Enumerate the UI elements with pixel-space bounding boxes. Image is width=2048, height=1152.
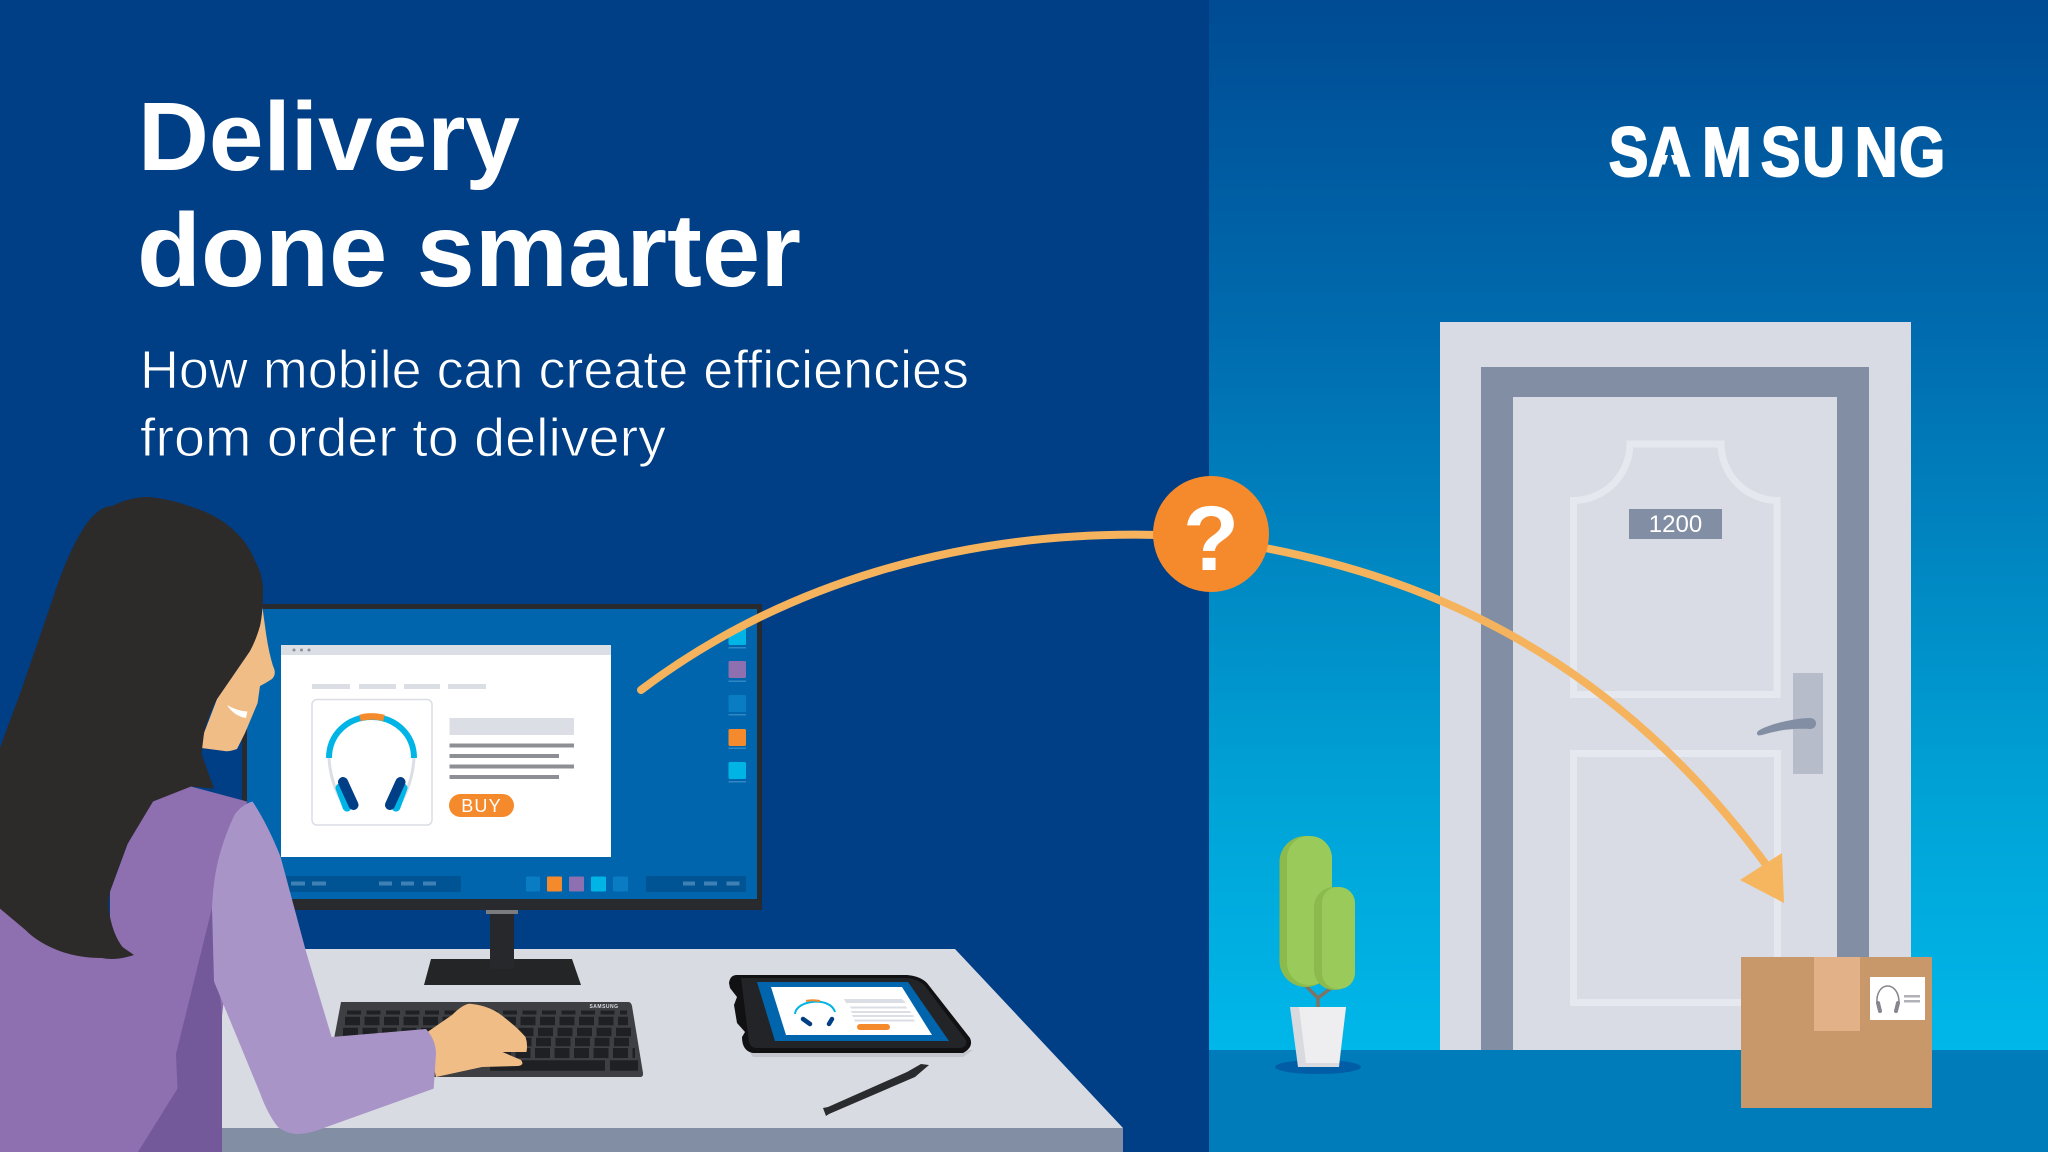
desk: [221, 949, 1123, 1152]
box tape: [1814, 957, 1860, 1031]
stand base: [424, 959, 581, 985]
headphone wires: [329, 758, 414, 802]
arrow: question mark to parcel: [1265, 548, 1784, 903]
door outer frame: [1440, 322, 1911, 1050]
question mark: ?: [1183, 488, 1239, 590]
face: [202, 590, 275, 751]
monitor screen: [247, 609, 757, 899]
torso shadow: [138, 908, 222, 1152]
monitor stand: [424, 909, 581, 985]
box: package: [1741, 957, 1932, 1108]
subtitle line 1: How mobile can create efficiencies: [140, 340, 969, 400]
door inner dark frame: [1481, 367, 1869, 1050]
headphone cups: [343, 782, 400, 805]
tablet: [729, 975, 973, 1057]
button pill: [449, 794, 514, 817]
plant shadow: [1275, 1060, 1361, 1074]
door handle: [1757, 673, 1823, 774]
desk front: [221, 1128, 1123, 1152]
subtitle: [140, 340, 969, 468]
tablet headphones: [795, 1000, 835, 1024]
door number: 1200: [1649, 511, 1702, 538]
desktop side icons: [728, 628, 746, 782]
window body: [281, 645, 611, 857]
desk top: [221, 949, 1123, 1128]
handle plate: [1793, 673, 1823, 774]
wall gradient: [1209, 0, 2048, 1050]
stylus pen: [823, 1064, 929, 1116]
monitor bezel: [242, 604, 762, 910]
label lines: [1904, 995, 1920, 1002]
browser window: [281, 645, 611, 857]
stand neck: [490, 909, 514, 969]
tablet text lines: [844, 999, 915, 1022]
plant pot: [1299, 1007, 1346, 1063]
icon: headphones: [329, 716, 414, 807]
window dots: [292, 648, 310, 652]
door: [1440, 322, 1911, 1050]
plant stems: [1306, 986, 1331, 1008]
arrow line: [1265, 548, 1770, 870]
subtitle line 2: from order to delivery: [140, 408, 666, 468]
product title bar: [450, 718, 574, 735]
buy button: [449, 794, 514, 817]
tablet screen: [757, 982, 949, 1041]
icon: label headphones: [1877, 986, 1899, 1011]
taskbar: [250, 876, 746, 892]
headphone band: [329, 717, 414, 758]
tablet shadow: [745, 1045, 973, 1057]
keyboard brand: SAMSUNG: [589, 1004, 619, 1010]
product card: [312, 700, 432, 825]
door leaf: [1513, 397, 1837, 1050]
tablet buy button: [857, 1024, 890, 1030]
panel: right doorstep scene: [1209, 0, 2048, 1152]
window title bar: [281, 645, 611, 655]
tall leaf shade: [1280, 836, 1332, 987]
box label: [1870, 977, 1925, 1020]
arrow: order path to question mark: [641, 535, 1160, 690]
door lower panel: [1574, 754, 1778, 1002]
panel: left dark blue background: [0, 0, 1209, 1152]
title line 2: done smarter: [137, 193, 801, 309]
torso: [0, 786, 247, 1152]
keyboard: [320, 1002, 643, 1077]
smile: [227, 705, 247, 718]
keyboard body: [320, 1002, 643, 1077]
floor: [1209, 1050, 2048, 1152]
headphone cup backs: [340, 788, 403, 807]
tall leaf: [1287, 836, 1332, 985]
short leaf shade: [1314, 887, 1355, 990]
hand: [426, 1004, 527, 1077]
nav bars: [312, 684, 486, 689]
monitor: [242, 604, 762, 985]
hair: [0, 497, 263, 959]
title line 1: Delivery: [138, 82, 520, 191]
box body: [1741, 957, 1932, 1108]
product description lines: [450, 744, 574, 779]
logo word: SAMSUNG: [1609, 112, 1945, 191]
question mark badge: [1153, 476, 1269, 592]
door number plate: [1629, 509, 1722, 539]
sleeve: [212, 802, 436, 1134]
door upper panel: [1574, 444, 1777, 694]
button label: BUY: [461, 796, 502, 816]
tablet case: [729, 975, 971, 1053]
title: [137, 82, 801, 309]
tablet bezel: [741, 978, 966, 1048]
keyboard keys: [340, 1012, 638, 1066]
plant: [1275, 836, 1361, 1074]
woman: [0, 497, 527, 1152]
badge circle: [1153, 476, 1269, 592]
handle lever: [1757, 718, 1816, 735]
headphone band top: [360, 716, 384, 718]
logo: Samsung: [1609, 112, 1945, 191]
arrow head: [1740, 853, 1784, 903]
short leaf: [1322, 887, 1355, 989]
plate: [1629, 509, 1722, 539]
stand cap: [486, 909, 518, 914]
tablet page: [771, 987, 932, 1035]
plant pot shade: [1290, 1007, 1346, 1067]
logo A crossbar mask: [1661, 150, 1678, 178]
